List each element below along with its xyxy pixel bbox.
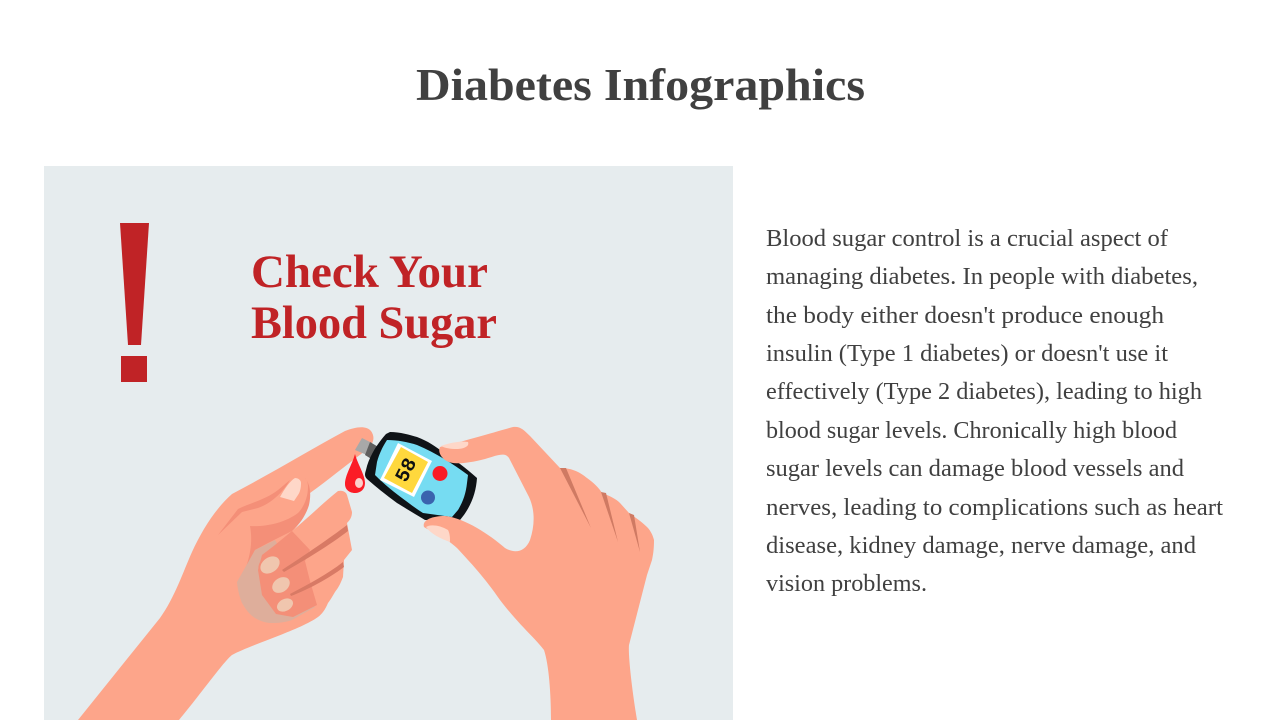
body text: managing diabetes. In people with diabetes, <box>766 264 1198 290</box>
panel heading: Blood Sugar <box>251 297 497 349</box>
panel heading: Check Your <box>251 246 488 298</box>
body text: Blood sugar control is a crucial aspect of <box>766 226 1168 252</box>
panel: illustration <box>44 166 733 720</box>
body text: vision problems. <box>766 571 927 597</box>
test strip <box>355 438 372 455</box>
meter reading: 58 <box>392 455 423 487</box>
body text: nerves, leading to complications such as heart <box>766 495 1223 521</box>
body text: insulin (Type 1 diabetes) or doesn't use it <box>766 341 1168 367</box>
meter screen <box>380 443 432 497</box>
palm shadow <box>242 478 310 577</box>
panel heading <box>251 246 497 349</box>
fingernails <box>280 478 301 501</box>
back of fingers shade <box>237 540 315 623</box>
index finger fold <box>218 480 290 535</box>
icon: exclamation mark <box>120 223 149 382</box>
meter buttons <box>432 466 448 481</box>
knuckle creases <box>560 468 591 528</box>
left hand <box>78 427 373 720</box>
finger creases <box>282 525 348 572</box>
body text: effectively (Type 2 diabetes), leading to high <box>766 379 1202 405</box>
body text <box>766 226 1223 597</box>
blood drop <box>345 454 365 493</box>
glucose meter <box>355 432 477 520</box>
body text: disease, kidney damage, nerve damage, and <box>766 533 1196 559</box>
body text: blood sugar levels. Chronically high blood <box>766 418 1177 444</box>
finger and thumb nails <box>441 442 468 449</box>
body text: sugar levels can damage blood vessels and <box>766 456 1184 482</box>
lower finger shade <box>258 531 317 617</box>
body text: the body either doesn't produce enough <box>766 303 1164 329</box>
meter body <box>365 432 477 520</box>
title: Diabetes Infographics <box>416 59 865 110</box>
right hand <box>424 427 654 720</box>
